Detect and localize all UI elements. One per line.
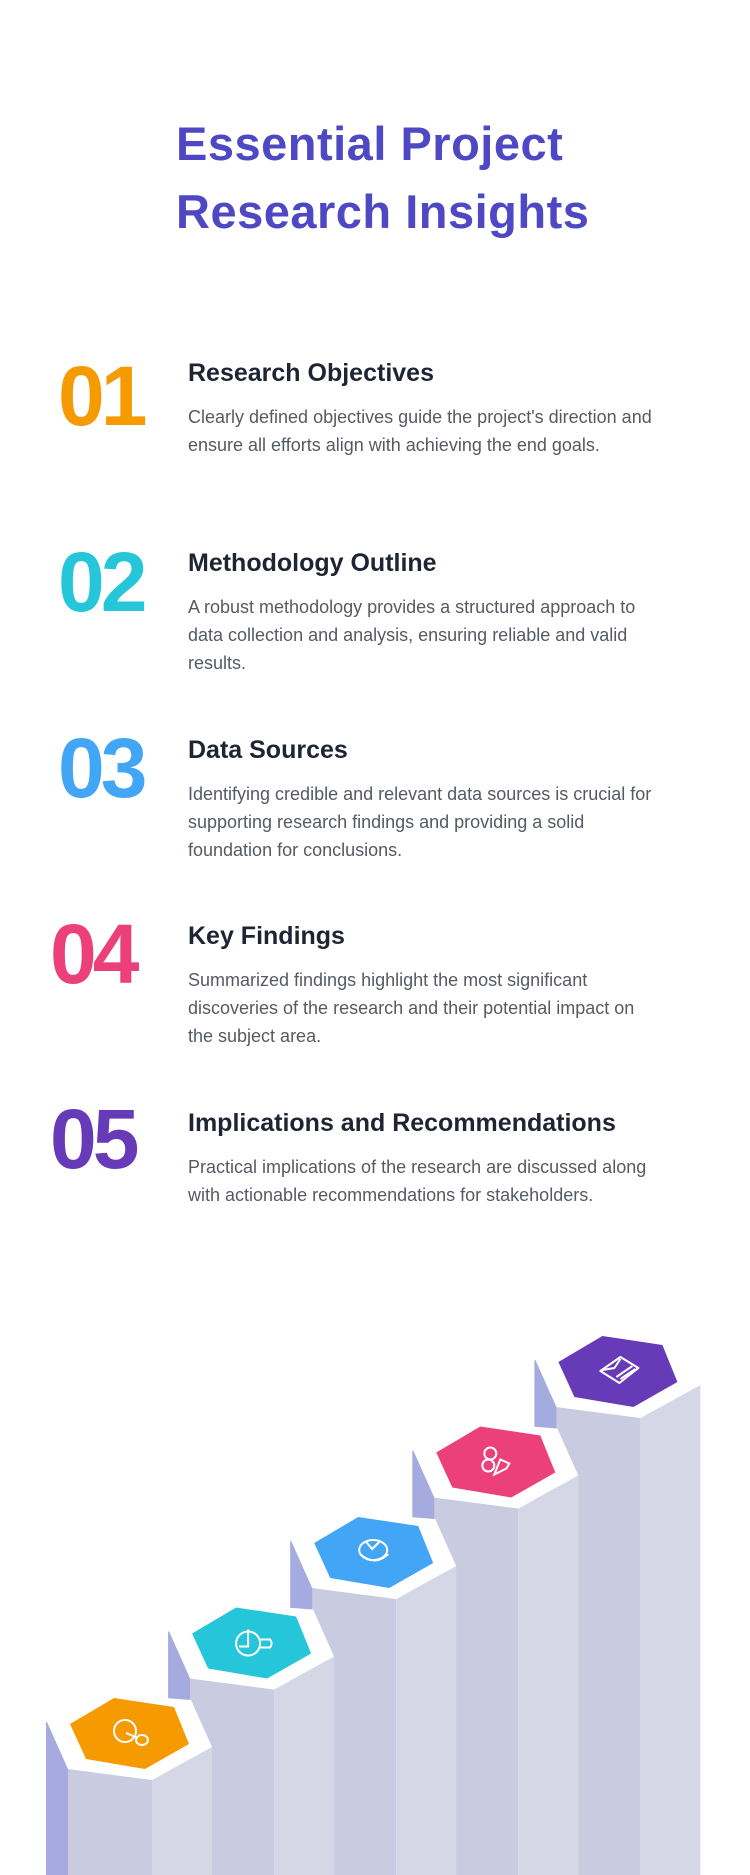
step 4 [412, 1422, 578, 1875]
heading 04: Key Findings [188, 922, 345, 950]
icon: envelope [600, 1357, 638, 1383]
icon: clock [236, 1630, 272, 1656]
text 04: Summarized findings highlight the most significant discoveries of the research and their potential impact on the subject area. [188, 970, 634, 1046]
item 05 [50, 1092, 646, 1205]
heading 01: Research Objectives [188, 359, 434, 387]
item 01 [58, 349, 652, 455]
heading 05: Implications and Recommendations [188, 1109, 616, 1137]
heading 02: Methodology Outline [188, 549, 437, 577]
number 02: 02 [58, 535, 143, 629]
step 2 [168, 1604, 334, 1875]
heading 03: Data Sources [188, 736, 348, 764]
text 05: Practical implications of the research are discussed along with actionable recommendations for stakeholders. [188, 1157, 646, 1205]
item 03 [58, 721, 651, 860]
title [176, 117, 589, 238]
icon: people [482, 1448, 509, 1474]
number 04: 04 [50, 907, 135, 1001]
item 04 [50, 907, 634, 1046]
step 5 [534, 1332, 700, 1875]
number 05: 05 [50, 1092, 135, 1186]
title: Essential Project [176, 117, 563, 170]
step 3 [290, 1513, 456, 1875]
icon: lightbulb [114, 1720, 148, 1745]
number 03: 03 [58, 721, 143, 815]
step 1 [46, 1694, 212, 1875]
title: Research Insights [176, 185, 589, 238]
icon: pie chart [359, 1540, 388, 1560]
text 03: Identifying credible and relevant data sources is crucial for supporting research findings and providing a solid foundation for conclusions. [188, 784, 651, 860]
item 02 [58, 535, 635, 673]
text 02: A robust methodology provides a structured approach to data collection and analysis, ensuring reliable and valid results. [188, 597, 635, 673]
number 01: 01 [58, 349, 143, 443]
text 01: Clearly defined objectives guide the project's direction and ensure all efforts align with achieving the end goals. [188, 407, 652, 455]
